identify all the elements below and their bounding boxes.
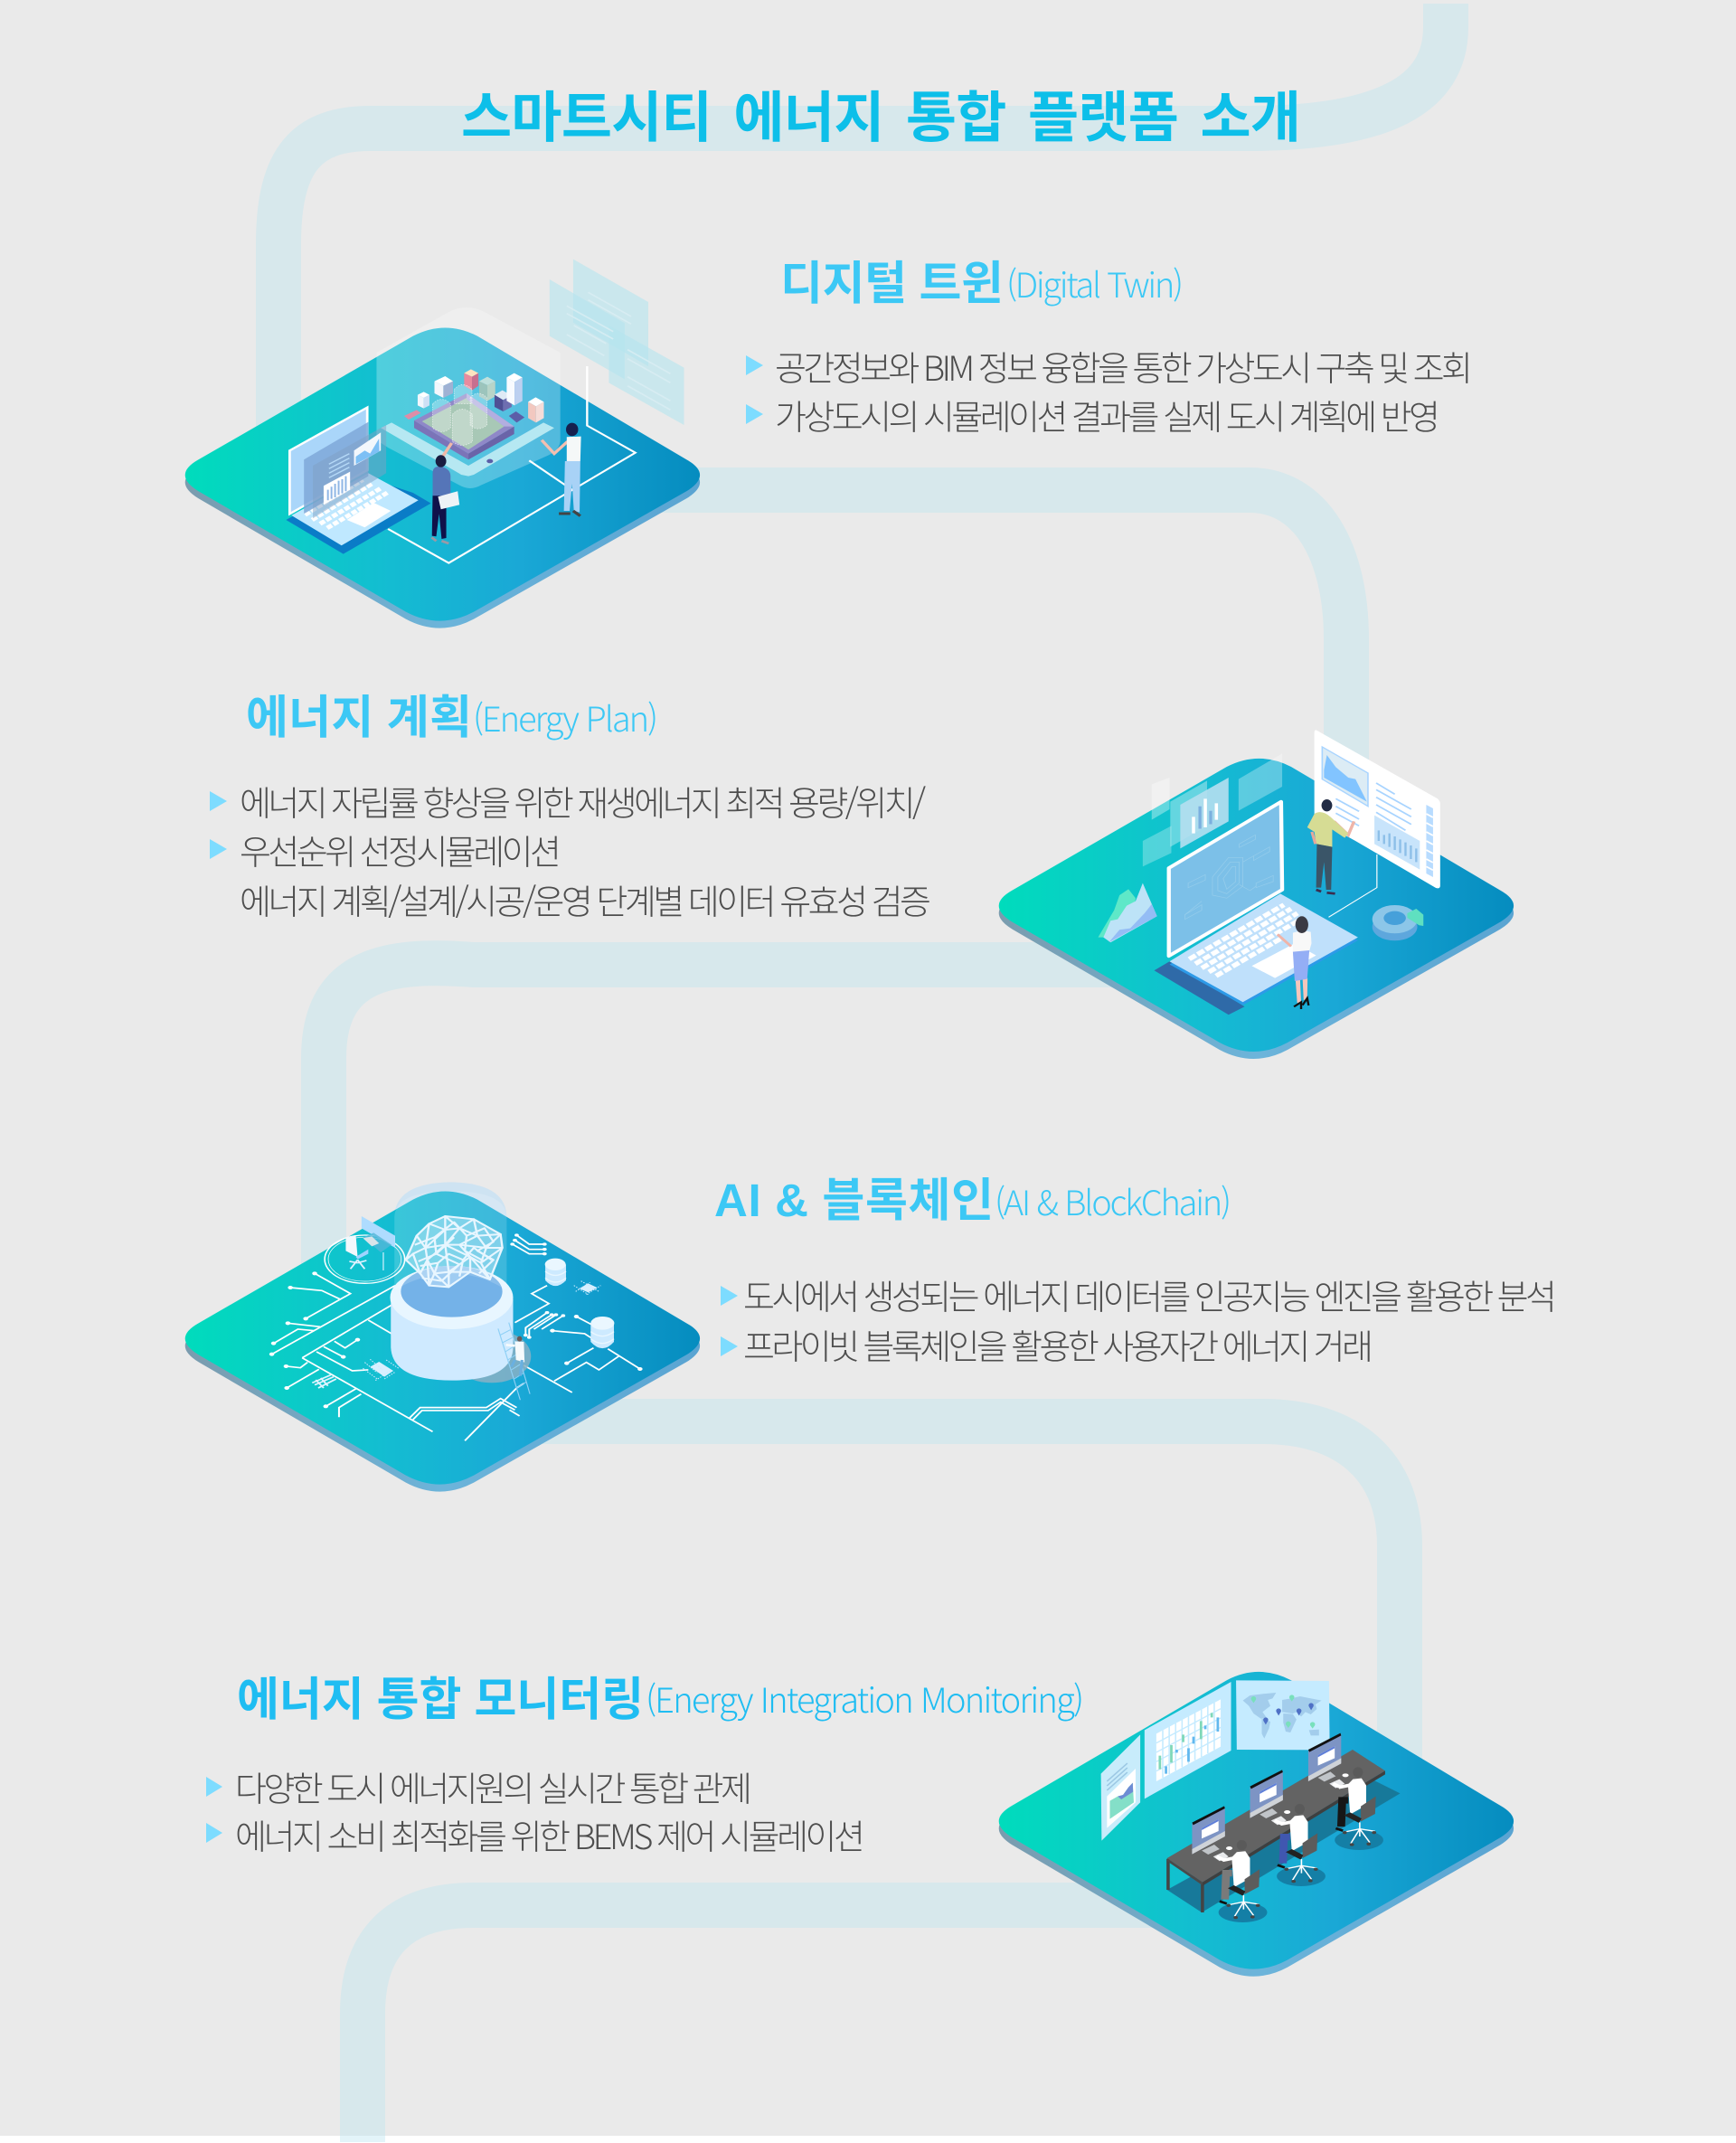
heading: digital twin: 디지털 트윈	[780, 258, 1004, 309]
workstation 2	[1250, 1770, 1318, 1883]
floor outline	[388, 366, 636, 563]
circuit traces	[272, 1235, 640, 1440]
bullet list: energy integration monitoring: 다양한 도시 에너지원의 실시간 통합 관제	[235, 1761, 752, 1811]
3D city model	[404, 369, 543, 459]
heading: energy plan	[246, 692, 658, 743]
wall panel: world map	[1236, 1680, 1330, 1750]
heading: digital twin	[780, 258, 1184, 309]
person: woman at keyboard	[1278, 916, 1311, 1009]
wall panel: area chart	[1101, 1734, 1140, 1841]
tablet plate	[381, 422, 572, 490]
bullet list: energy integration monitoring	[206, 1761, 865, 1859]
bullet list: energy integration monitoring: 에너지 소비 최적화를 위한 BEMS 제어 시뮬레이션	[235, 1809, 865, 1859]
wall panel: grid chart	[1145, 1682, 1231, 1798]
area chart icon	[1098, 883, 1157, 942]
cylinder base	[390, 1266, 531, 1383]
bullet list: digital twin: 공간정보와 BIM 정보 융합을 통한 가상도시 구축 및 조회	[775, 341, 1473, 391]
heading: digital twin: (Digital Twin)	[1006, 258, 1184, 307]
seated legs	[1225, 1800, 1348, 1900]
heading: energy integration monitoring: 에너지 통합 모니터링	[237, 1674, 644, 1725]
heading: energy integration monitoring	[237, 1673, 1084, 1725]
chips	[312, 1281, 600, 1388]
bullet list: energy plan: 에너지 자립률 향상을 위한 재생에너지 최적 용량/위치/	[240, 776, 926, 826]
connector line	[1328, 854, 1377, 917]
glass hologram box	[376, 307, 561, 488]
bullet list: energy plan: 우선순위 선정시뮬레이션	[240, 825, 561, 874]
floating document panels	[550, 260, 684, 425]
brain mesh	[406, 1216, 503, 1287]
heading: energy integration monitoring: (Energy Integration Monitoring)	[646, 1673, 1084, 1723]
platform base	[999, 759, 1514, 1059]
workstation 3	[1308, 1733, 1376, 1846]
desk ring and workstation	[325, 1216, 405, 1283]
desk	[1167, 1750, 1385, 1912]
bullet list: AI and blockchain	[721, 1270, 1557, 1369]
heading: energy plan: 에너지 계획	[246, 692, 472, 743]
illustration: digital twin platform	[185, 260, 700, 628]
database icons	[545, 1259, 614, 1348]
circuit nodes	[269, 1233, 643, 1408]
desk shadow	[1167, 1779, 1401, 1912]
floating chart panels	[1143, 753, 1282, 866]
laptop	[1155, 802, 1358, 1015]
title: 스마트시티 에너지 통합 플랫폼 소개	[461, 87, 1301, 148]
bullet list: digital twin: 가상도시의 시뮬레이션 결과를 실제 도시 계획에 반영	[775, 390, 1440, 439]
heading: AI and blockchain: AI & 블록체인	[714, 1175, 994, 1226]
donut chart	[1373, 905, 1423, 940]
glass dome front	[394, 1191, 506, 1290]
heading: AI and blockchain	[714, 1175, 1231, 1226]
glass dome back	[394, 1182, 506, 1293]
laptop	[286, 408, 431, 554]
person on ladder	[498, 1323, 530, 1400]
bullet list: AI and blockchain: 프라이빗 블록체인을 활용한 사용자간 에너지 거래	[743, 1319, 1373, 1369]
person: man at board	[1307, 799, 1354, 893]
chair shadows	[1219, 1830, 1383, 1922]
platform base	[999, 1672, 1514, 1977]
bullet list: AI and blockchain: 도시에서 생성되는 에너지 데이터를 인공지능 엔진을 활용한 분석	[743, 1270, 1557, 1319]
illustration: monitoring platform	[999, 1672, 1514, 1977]
bottom white strip	[0, 2136, 1736, 2143]
bullet list: digital twin	[746, 341, 1473, 439]
heading: energy plan: (Energy Plan)	[473, 692, 658, 741]
person: man with tablet	[431, 443, 459, 543]
white data board	[1315, 730, 1440, 888]
platform base	[185, 327, 700, 628]
bullet list: energy plan	[210, 776, 931, 924]
heading: AI and blockchain: (AI & BlockChain)	[995, 1175, 1231, 1225]
illustration: energy plan platform	[999, 730, 1514, 1059]
bullet list: energy plan: 에너지 계획/설계/시공/운영 단계별 데이터 유효성 검증	[240, 874, 931, 924]
person: woman pointing	[542, 423, 581, 516]
platform base	[185, 1191, 700, 1492]
connecting ribbon path	[278, 4, 1446, 2143]
workstation 1	[1192, 1806, 1260, 1919]
illustration: AI blockchain platform	[185, 1182, 700, 1492]
